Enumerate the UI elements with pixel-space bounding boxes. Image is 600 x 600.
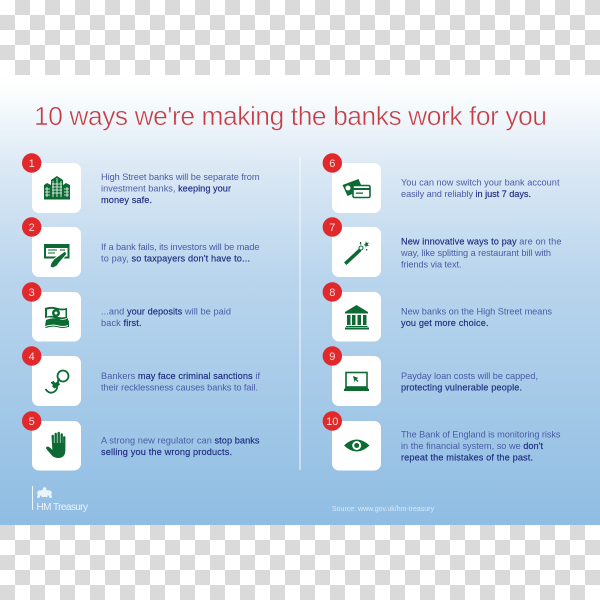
badge 9: 9 [329, 351, 335, 363]
text 5: A strong new regulator can stop banks [101, 436, 260, 446]
badge 3 [22, 282, 41, 302]
badge 10: 10 [326, 416, 338, 428]
badge 8: 8 [329, 287, 335, 299]
badge 6: 6 [329, 158, 335, 170]
icon: cheque and pen [44, 244, 70, 268]
text 4: Bankers may face criminal sanctions if [101, 371, 260, 381]
icon: bank cards [342, 179, 370, 198]
item 9: protecting vulnerable people. [401, 382, 522, 392]
item 7: friends via text. [401, 259, 462, 269]
item 9 [323, 346, 538, 406]
text 9: Payday loan costs will be capped, [401, 371, 538, 381]
item 10 [323, 411, 561, 470]
item 10: repeat the mistakes of the past. [401, 452, 533, 462]
text 7: New innovative ways to pay are on the [401, 237, 562, 247]
text 6: You can now switch your bank account [401, 178, 560, 188]
badge 1: 1 [29, 158, 35, 170]
item 5 [22, 411, 260, 470]
source note: Source: www.gov.uk/hm-treasury [332, 506, 434, 513]
badge 7: 7 [329, 222, 335, 234]
item 7 [323, 217, 562, 277]
item 2: to pay, so taxpayers don't have to... [101, 253, 250, 263]
badge 3: 3 [29, 287, 35, 299]
badge 8 [323, 282, 342, 302]
item 1 [22, 153, 260, 213]
badge 9 [323, 346, 342, 366]
item 6 [323, 153, 560, 213]
badge 4 [22, 346, 41, 366]
item 8: you get more choice. [401, 318, 488, 328]
crest [37, 487, 52, 498]
item 10: in the financial system, so we don't [401, 441, 543, 451]
item 4 [22, 346, 260, 406]
icon: eye [344, 440, 370, 452]
text 3: ...and your deposits will be paid [101, 307, 231, 317]
badge 5 [22, 411, 41, 431]
item 3 [22, 282, 231, 342]
text 1: High Street banks will be separate from [101, 172, 260, 182]
icon: laptop [344, 372, 369, 391]
item 1: money safe. [101, 195, 152, 205]
icon: raised hand [46, 432, 65, 458]
badge 5: 5 [29, 416, 35, 428]
badge 2 [22, 217, 41, 237]
item 6: easily and reliably in just 7 days. [401, 189, 531, 199]
badge 1 [22, 153, 41, 173]
item 3: back first. [101, 318, 142, 328]
badge 4: 4 [29, 351, 35, 363]
icon: bank building [345, 305, 369, 330]
icon: buildings [44, 176, 70, 200]
item 2 [22, 217, 260, 277]
title: 10 ways we're making the banks work for you [34, 101, 547, 131]
text 10: The Bank of England is monitoring risks [401, 430, 561, 440]
HM Treasury logo: HM Treasury [36, 502, 88, 513]
item 1: investment banks, keeping your [101, 183, 231, 193]
poster panel [0, 75, 600, 525]
icon: handcuffs [46, 370, 68, 393]
text 8: New banks on the High Street means [401, 306, 552, 316]
item 5: selling you the wrong products. [101, 447, 232, 457]
item 8 [323, 282, 552, 342]
icon: banknotes [45, 307, 69, 328]
badge 2: 2 [29, 222, 35, 234]
badge 7 [323, 217, 342, 237]
badge 10 [323, 411, 342, 431]
HM Treasury logo [32, 486, 88, 513]
badge 6 [323, 153, 342, 173]
text 2: If a bank fails, its investors will be made [101, 242, 260, 252]
item 7: way, like splitting a restaurant bill with [400, 248, 551, 258]
item 4: their recklessness causes banks to fail. [101, 382, 258, 392]
icon: magic wand [344, 241, 369, 265]
column divider [300, 157, 301, 470]
